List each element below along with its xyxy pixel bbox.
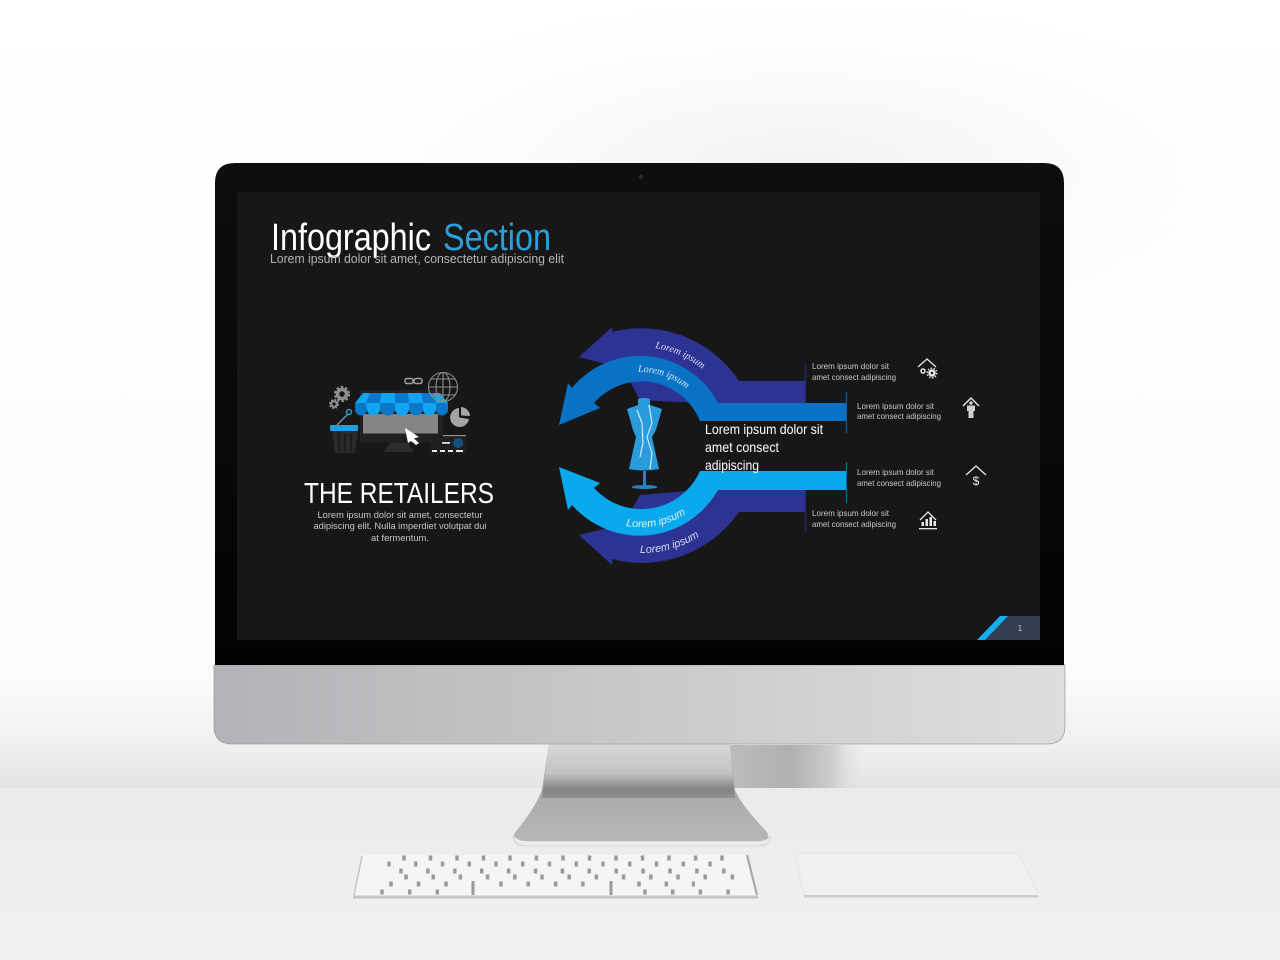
divider lines bbox=[806, 362, 846, 533]
item 1 text: Lorem ipsum dolor sit bbox=[812, 361, 890, 371]
item 2 text bbox=[857, 401, 941, 421]
trackpad bbox=[796, 853, 1038, 898]
icon: awning bbox=[355, 393, 448, 416]
item 2 text: amet consect adipiscing bbox=[857, 411, 941, 421]
arrow diagram bbox=[559, 327, 848, 565]
list item 1 bbox=[812, 359, 937, 382]
icon: home chart bbox=[919, 512, 937, 529]
monitor chin bbox=[214, 665, 1065, 744]
retailers description: adipiscing elit. Nulla imperdiet volutpat dui bbox=[314, 521, 486, 532]
item 1 text: amet consect adipiscing bbox=[812, 372, 896, 382]
item 3 text: amet consect adipiscing bbox=[857, 478, 941, 488]
desk surface bbox=[0, 788, 1280, 960]
keyboard bbox=[353, 855, 758, 898]
item 4 text bbox=[812, 508, 896, 529]
icon: dress mannequin bbox=[627, 398, 662, 489]
page number tab bbox=[977, 616, 1040, 640]
center text: adipiscing bbox=[705, 457, 759, 473]
list item 2 bbox=[857, 398, 979, 421]
monitor bezel bbox=[215, 163, 1064, 665]
camera bbox=[639, 175, 643, 179]
arrow: lower light blue bbox=[559, 467, 846, 536]
arrow: lower light blue: Lorem ipsum bbox=[626, 510, 685, 528]
item 4 text: amet consect adipiscing bbox=[812, 519, 896, 529]
center text: Lorem ipsum dolor sit bbox=[705, 421, 823, 437]
item 4 text: Lorem ipsum dolor sit bbox=[812, 508, 890, 518]
screen bbox=[237, 192, 1040, 640]
icon: globe bbox=[428, 372, 458, 402]
icon: payment card bbox=[431, 435, 466, 453]
list item 4 bbox=[812, 508, 937, 529]
center text bbox=[705, 421, 823, 473]
arrow: upper medium blue: Lorem ipsum bbox=[638, 365, 688, 388]
icon: cursor bbox=[405, 428, 419, 445]
wall haze bbox=[320, 0, 1280, 340]
heading: the retailers: THE RETAILERS bbox=[304, 478, 494, 510]
subtitle: Lorem ipsum dolor sit amet, consectetur adipiscing elit bbox=[270, 252, 565, 266]
wall shadow bbox=[730, 745, 865, 788]
key gaps bbox=[380, 858, 735, 895]
icon: home person bbox=[963, 398, 979, 418]
page number tab: 1 bbox=[1018, 624, 1023, 633]
icon: online store bbox=[330, 372, 470, 453]
arrow: lower dark bbox=[579, 490, 805, 565]
item 1 text bbox=[812, 361, 896, 382]
icon: desktop computer bbox=[360, 390, 443, 452]
item 3 text bbox=[857, 467, 941, 488]
retailers description bbox=[314, 510, 486, 544]
retailers description: Lorem ipsum dolor sit amet, consectetur bbox=[318, 510, 482, 521]
list item 3 bbox=[857, 466, 986, 488]
monitor stand bbox=[513, 744, 770, 846]
arrow: upper medium blue bbox=[559, 356, 846, 425]
icon: home dollar: $ bbox=[973, 474, 980, 488]
title: Infographic bbox=[271, 217, 431, 259]
icon: link bbox=[405, 378, 422, 384]
arrow: upper dark bbox=[579, 327, 805, 403]
arrow: upper dark: Lorem ipsum bbox=[654, 342, 704, 369]
icon: pie chart bbox=[450, 407, 470, 427]
icon: gears bbox=[330, 387, 349, 408]
item 2 text: Lorem ipsum dolor sit bbox=[857, 401, 935, 411]
title bbox=[271, 217, 551, 259]
arrow: lower dark: Lorem ipsum bbox=[640, 532, 698, 553]
item 3 text: Lorem ipsum dolor sit bbox=[857, 467, 935, 477]
retailers description: at fermentum. bbox=[371, 533, 429, 544]
icon: home gears bbox=[918, 359, 937, 378]
title: Section bbox=[443, 217, 551, 259]
center text: amet consect bbox=[705, 439, 779, 455]
icon: basket bbox=[330, 410, 358, 453]
